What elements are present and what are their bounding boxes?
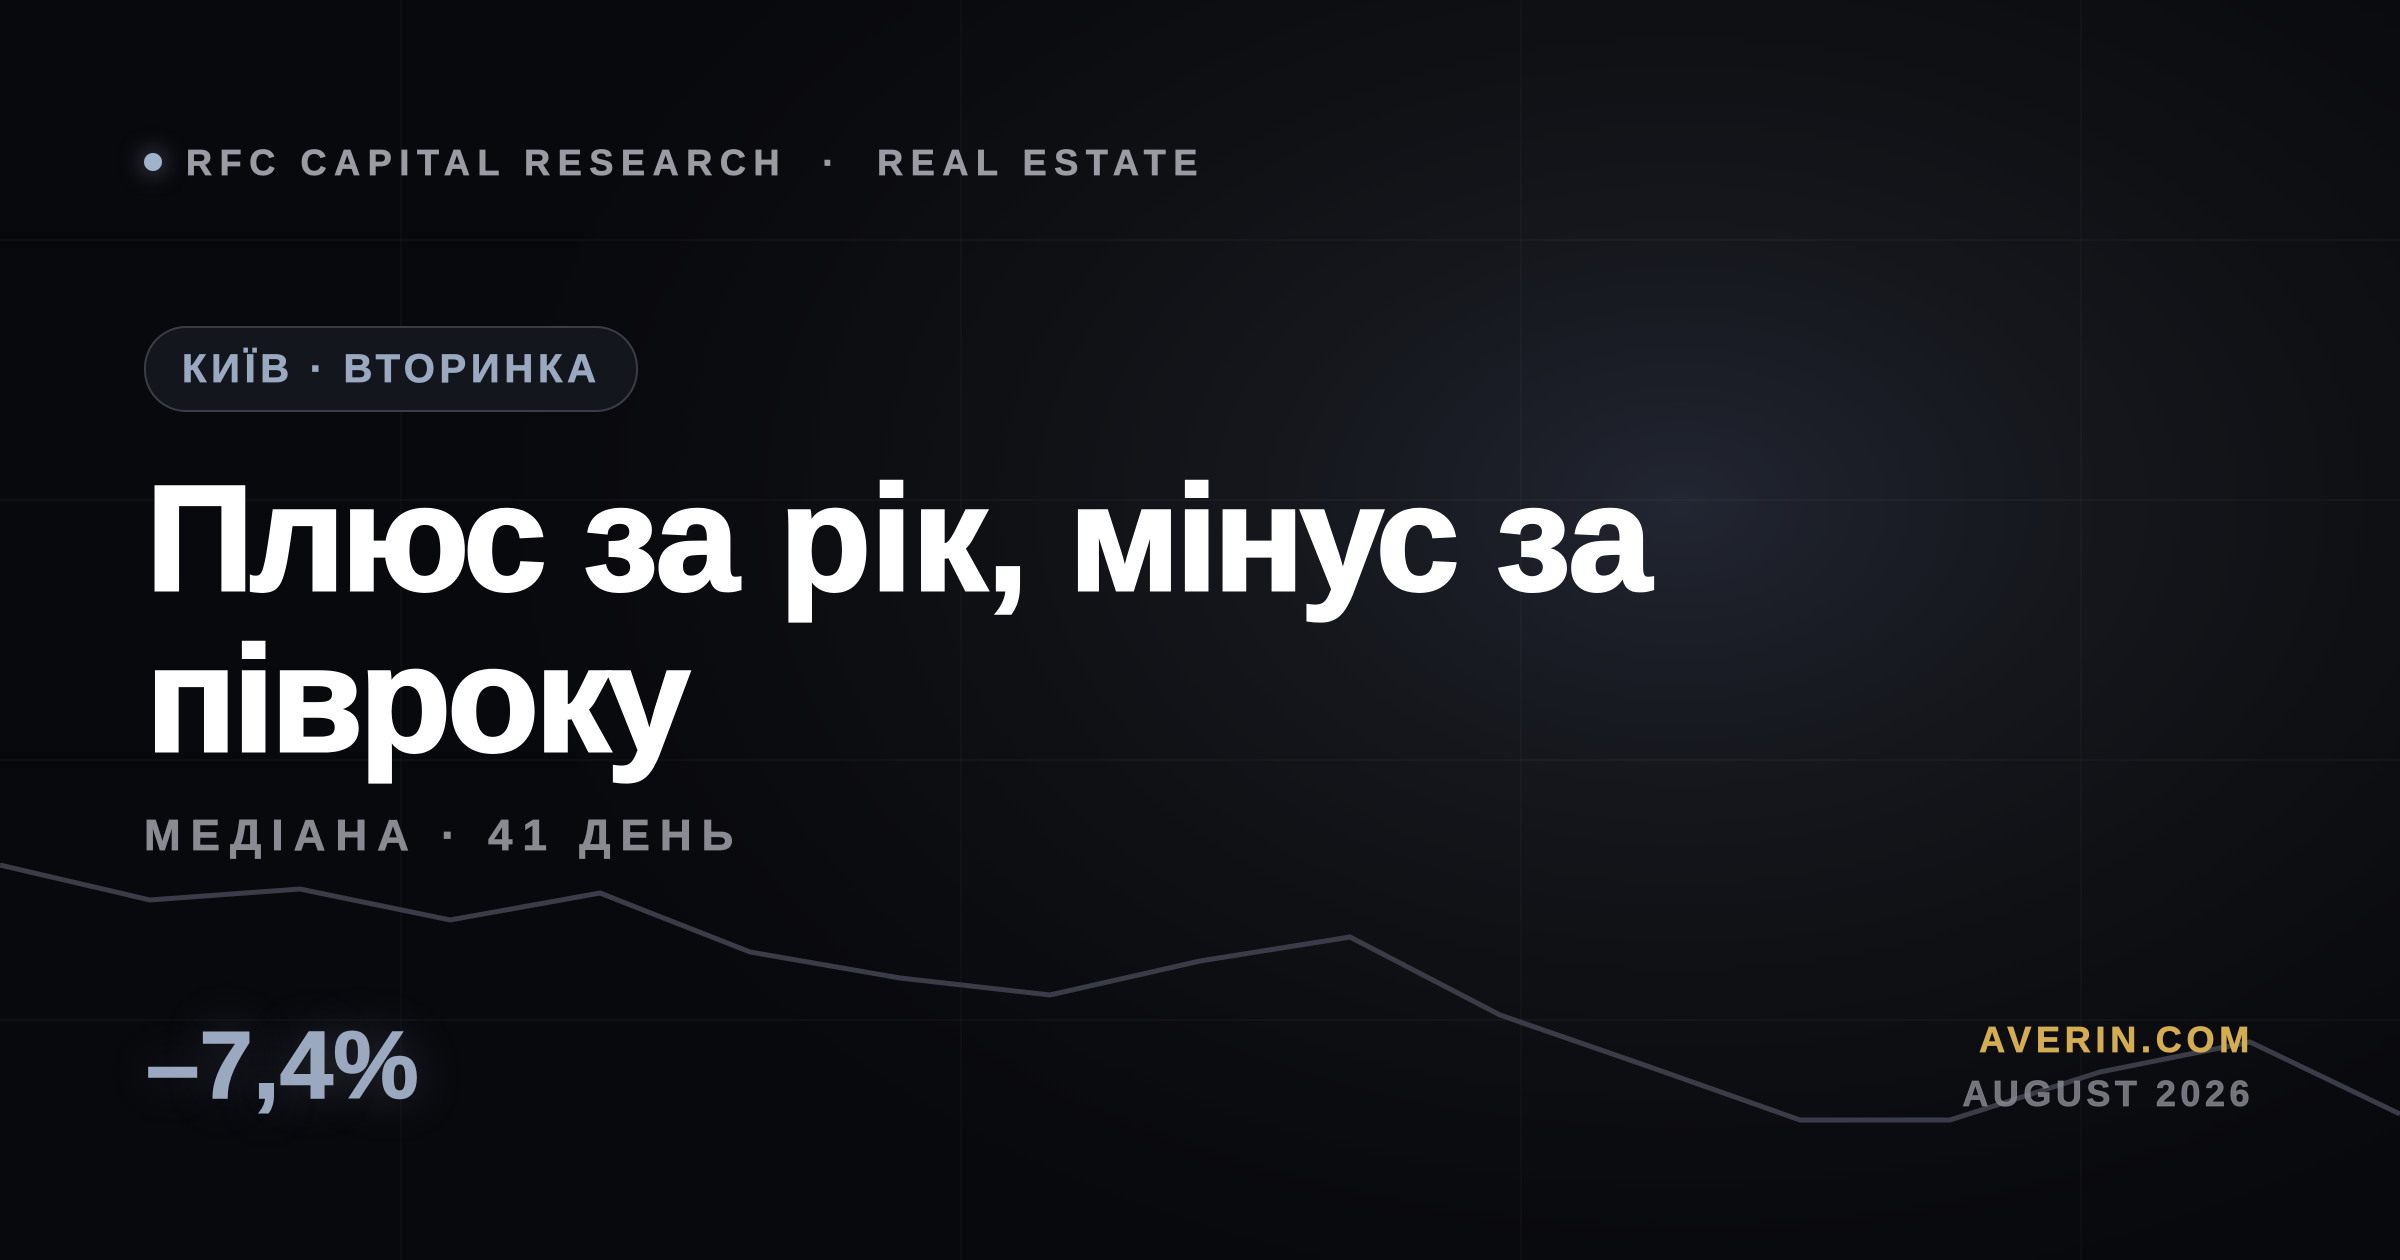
footer: brand: AVERIN.COM bbox=[1979, 1019, 2254, 1060]
key number: –7,4% bbox=[146, 1012, 419, 1119]
footer: date: AUGUST 2026 bbox=[1962, 1073, 2254, 1114]
header text: RFC CAPITAL RESEARCH · REAL ESTATE bbox=[186, 142, 1205, 183]
title: півроку bbox=[146, 615, 686, 783]
title: Плюс за рік, мінус за bbox=[146, 454, 1651, 622]
subtitle: МЕДІАНА · 41 ДЕНЬ bbox=[144, 811, 743, 860]
icon: glowing dot bbox=[144, 153, 162, 171]
tag pill bbox=[144, 326, 638, 412]
header: source label bbox=[134, 142, 1205, 183]
tag text: КИЇВ · ВТОРИНКА bbox=[182, 347, 601, 391]
title bbox=[146, 454, 1654, 784]
